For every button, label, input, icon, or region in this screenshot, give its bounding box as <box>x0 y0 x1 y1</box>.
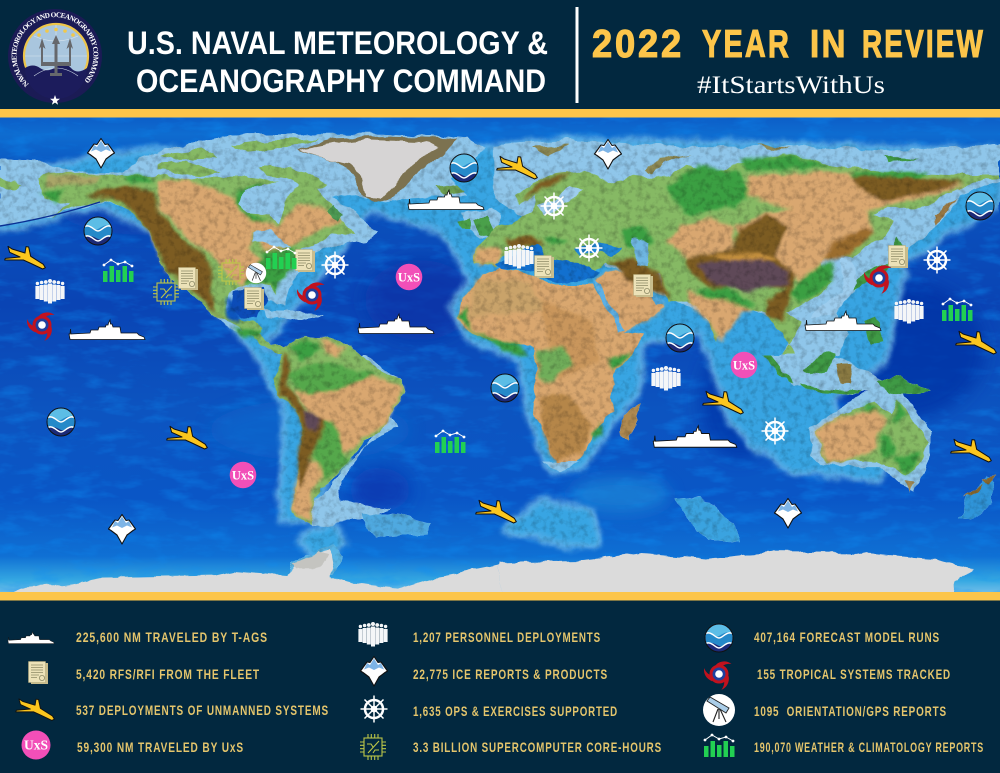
legend item: ice reports: 22,775 ICE REPORTS & PRODUCTS <box>413 666 608 682</box>
icon: ship <box>805 311 881 330</box>
icon: ship wheel <box>576 234 602 262</box>
legend item: personnel <box>358 622 601 646</box>
divider <box>576 7 578 103</box>
heading: 2022 year in review <box>592 23 985 66</box>
map icons <box>5 138 996 544</box>
hashtag: #ItStartsWithUs <box>697 70 885 99</box>
Aleutian trench <box>0 202 100 226</box>
land base <box>0 138 1000 525</box>
legend item: tropical systems <box>702 661 951 691</box>
icon: forecast model <box>450 154 478 182</box>
icon: unmanned system <box>167 426 207 449</box>
icon: unmanned system <box>5 246 45 269</box>
legend item: ops and exercises <box>360 696 618 722</box>
legend item: supercomputer: 3.3 BILLION SUPERCOMPUTER CORE-HOURS <box>413 739 662 755</box>
icon: personnel <box>35 279 65 304</box>
Antarctica <box>0 550 973 598</box>
legend item: ops and exercises: 1,635 OPS & EXERCISES SUPPORTED <box>413 703 618 719</box>
logo: command seal: NAVAL METEOROLOGY AND OCEANOGRAPHY COMMAND <box>12 12 98 88</box>
colour relief <box>40 157 967 522</box>
legend item: orientation reports <box>703 694 947 726</box>
legend item: ice reports <box>360 656 608 686</box>
icon: UxS: UxS <box>232 468 254 482</box>
icon: ship <box>408 190 484 210</box>
icon: UxS: UxS <box>733 358 755 372</box>
icon: document <box>244 288 264 310</box>
icon: document <box>534 256 554 278</box>
gold bar: top <box>0 109 1000 118</box>
icon: forecast model <box>966 192 994 220</box>
icon: ship wheel <box>762 418 788 444</box>
icon: ship <box>69 320 145 340</box>
icon: supercomputer chip <box>218 259 244 285</box>
heading: 2022 year in review: 2022 <box>592 23 684 66</box>
legend item: UxS miles <box>22 730 244 760</box>
icon: forecast model <box>491 374 519 402</box>
heading: 2022 year in review: IN <box>810 23 848 66</box>
icon: weather chart <box>103 259 134 282</box>
legend item: supercomputer <box>360 734 662 760</box>
icon: iceberg <box>108 514 136 544</box>
icon: ship wheel <box>540 192 568 220</box>
icon: document <box>296 250 315 272</box>
title: U.S. NAVAL METEOROLOGY & <box>127 25 548 61</box>
legend item: weather reports <box>704 734 984 757</box>
icon: weather chart <box>942 298 972 321</box>
legend item: UxS miles: 59,300 NM TRAVELED BY UxS <box>77 739 244 755</box>
legend item: unmanned systems: 537 DEPLOYMENTS OF UNMANNED SYSTEMS <box>76 702 329 718</box>
legend item: unmanned systems <box>16 699 329 720</box>
legend item: forecast model runs <box>705 624 940 652</box>
icon: iceberg <box>594 140 622 169</box>
icon: iceberg <box>774 498 802 528</box>
legend item: UxS miles: UxS <box>24 738 48 752</box>
icon: unmanned system <box>703 391 743 414</box>
icon: unmanned system <box>951 439 991 462</box>
Greenland <box>297 137 457 202</box>
icon: ship <box>653 426 737 447</box>
icon: unmanned system <box>956 331 996 354</box>
icon: document <box>178 268 198 290</box>
heading: 2022 year in review: YEAR <box>702 23 791 66</box>
icon: UxS <box>731 352 757 378</box>
legend item: T-AGS: 225,600 NM TRAVELED BY T-AGS <box>76 629 268 645</box>
icon: unmanned system <box>497 156 537 179</box>
icon: supercomputer chip <box>153 279 179 305</box>
panel: world map <box>0 110 1000 598</box>
icon: UxS <box>396 264 422 290</box>
continental shelf <box>0 134 1000 575</box>
icon: document <box>634 274 653 297</box>
icon: ship wheel <box>322 252 348 278</box>
icon: document <box>888 246 908 268</box>
icon: ship <box>358 314 434 334</box>
icon: forecast model <box>666 324 694 352</box>
icon: UxS: UxS <box>398 270 420 284</box>
legend item: personnel: 1,207 PERSONNEL DEPLOYMENTS <box>413 629 601 645</box>
icon: UxS <box>230 462 256 488</box>
icon: ship wheel <box>924 246 950 274</box>
legend item: T-AGS <box>8 629 268 645</box>
icon: iceberg <box>88 138 114 168</box>
icon: weather chart <box>266 246 296 269</box>
title: OCEANOGRAPHY COMMAND <box>136 63 546 99</box>
icon: tropical system <box>25 312 54 342</box>
icon: weather chart <box>435 430 466 453</box>
icon: forecast model <box>84 217 112 245</box>
icon: personnel <box>651 366 681 390</box>
icon: forecast model <box>47 408 75 436</box>
icon: personnel <box>504 244 534 268</box>
legend item: RFS/RFI: 5,420 RFS/RFI FROM THE FLEET <box>76 666 260 682</box>
panel: legend <box>8 622 984 760</box>
icon: tropical system <box>862 265 892 295</box>
icon: unmanned system <box>476 500 516 523</box>
cyan halo around continents <box>0 140 1000 560</box>
gold bar: bottom <box>0 592 1000 600</box>
icon: telescope <box>246 263 266 283</box>
icon: personnel <box>894 299 924 324</box>
inland water and seas <box>232 178 858 332</box>
footer background <box>0 600 1000 773</box>
icon: tropical system <box>295 282 324 312</box>
title <box>127 25 548 99</box>
legend item: RFS/RFI <box>28 662 260 684</box>
